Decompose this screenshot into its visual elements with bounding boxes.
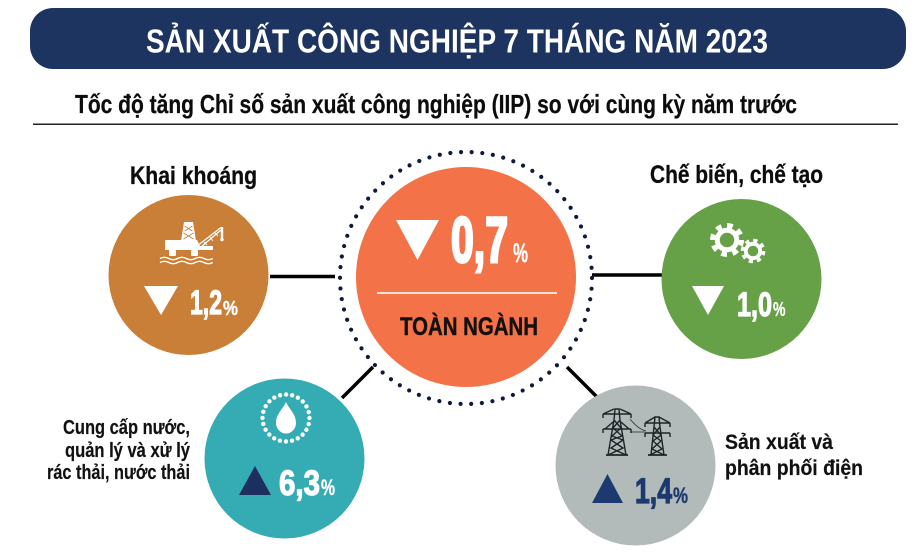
icon: down triangle (396, 220, 439, 260)
label: cung cấp nước: Cung cấp nước, (63, 417, 190, 439)
icon: power towers (603, 409, 670, 455)
heading: khai khoáng: Khai khoáng (130, 162, 257, 190)
value: percent: % (223, 298, 238, 320)
panel: toàn ngành (356, 167, 576, 387)
panel: sản xuất và phân phối điện (556, 386, 716, 546)
title banner (30, 8, 906, 69)
icon: down triangle (144, 286, 178, 315)
label: sản xuất và phân phối điện (725, 431, 863, 480)
heading: chế biến, chế tạo: Chế biến, chế tạo (650, 161, 823, 189)
value: 1,0: 1,0 (737, 286, 772, 324)
icon: up triangle (592, 474, 623, 503)
icon: gears (712, 226, 764, 262)
icon: up triangle (239, 466, 271, 495)
title: SẢN XUẤT CÔNG NGHIỆP 7 THÁNG NĂM 2023 (146, 22, 768, 60)
icon: water drop (262, 394, 310, 442)
connector lines (270, 275, 662, 398)
dotted ring (340, 152, 592, 404)
icon: oil rig (160, 222, 224, 264)
value: 6,3: 6,3 (279, 464, 320, 503)
panel: cung cấp nước (204, 378, 364, 538)
label: sản xuất và phân phối điện: phân phối điện (725, 457, 863, 480)
value: percent: % (513, 238, 528, 268)
label: sản xuất và phân phối điện: Sản xuất và (725, 431, 833, 454)
label: cung cấp nước (47, 417, 191, 484)
label: cung cấp nước: quản lý và xử lý (65, 440, 191, 462)
label: toàn ngành: TOÀN NGÀNH (400, 312, 538, 341)
panel: chế biến, chế tạo (662, 199, 822, 359)
value: 1,2: 1,2 (190, 284, 222, 322)
icon: down triangle (692, 286, 724, 315)
value: percent: % (321, 475, 335, 500)
label: cung cấp nước: rác thải, nước thải (47, 462, 190, 484)
value: percent: % (773, 299, 786, 321)
value: 1,4: 1,4 (635, 472, 672, 511)
panel: khai khoáng (108, 195, 268, 355)
value: 0,7: 0,7 (451, 204, 508, 276)
value: percent: % (673, 483, 688, 508)
